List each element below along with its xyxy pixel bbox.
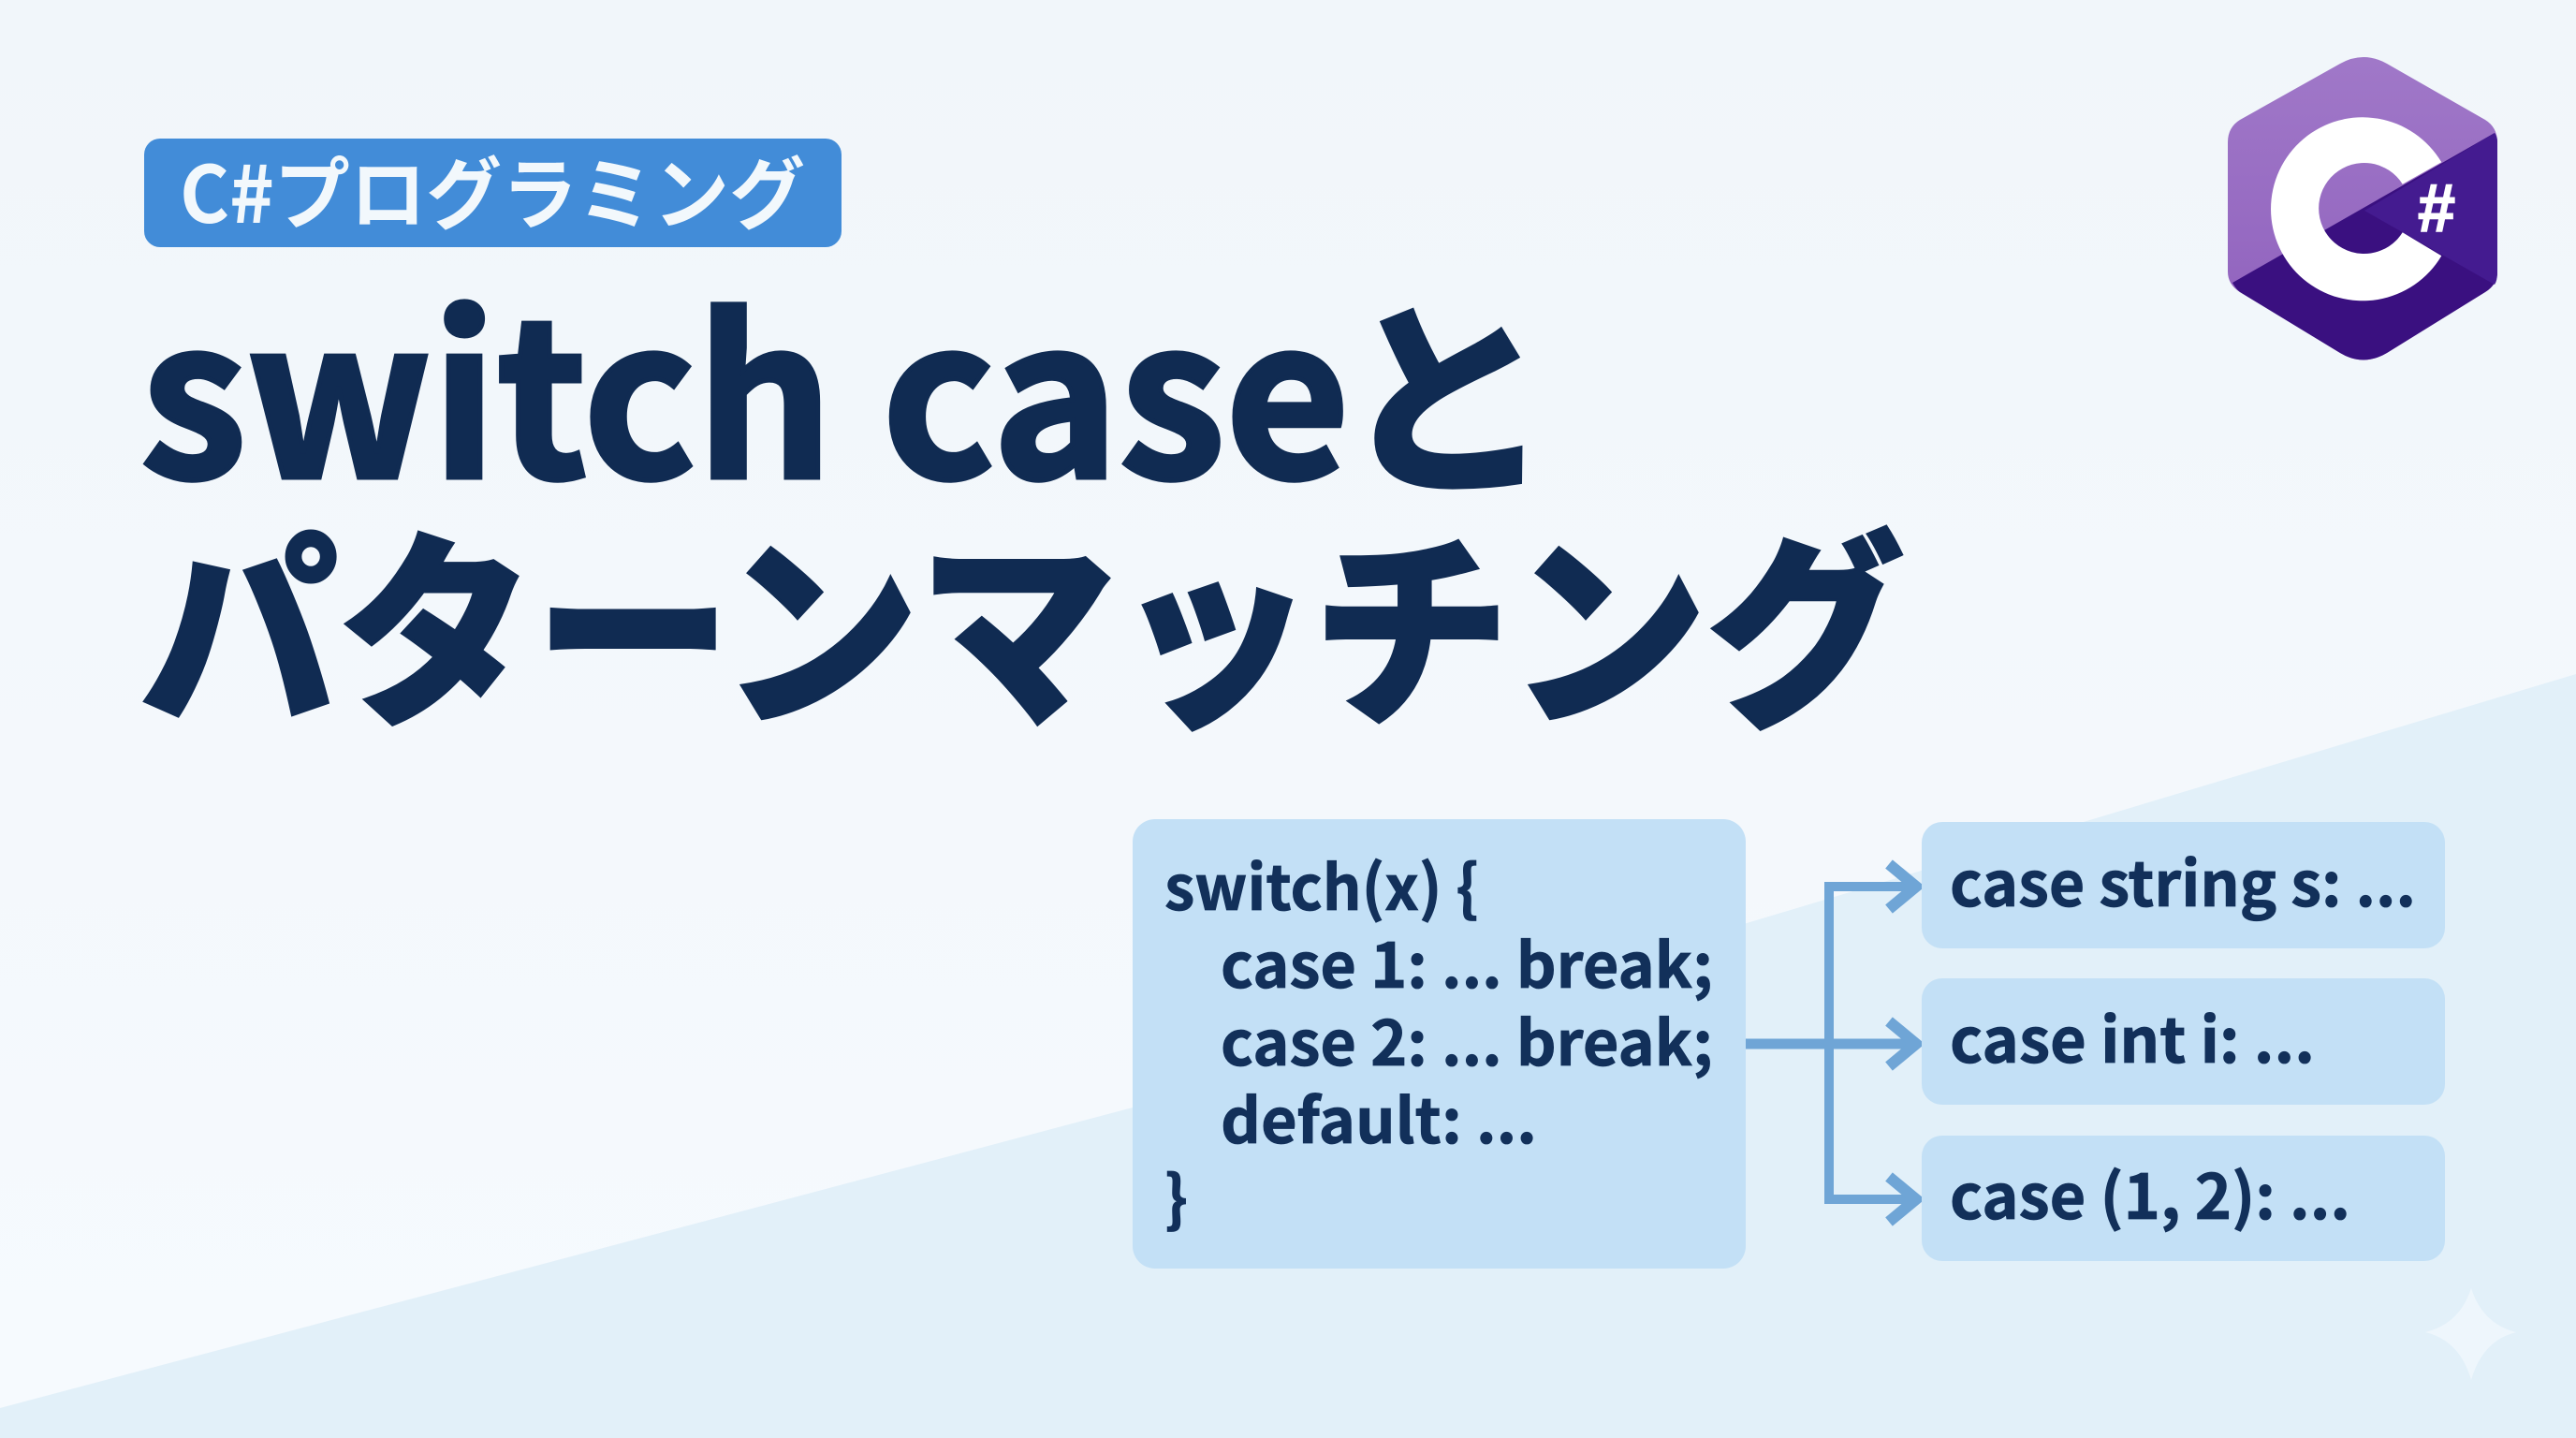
category badge: C#プログラミング — [180, 133, 805, 246]
panel: case tuple: case (1, 2): ... — [1950, 1148, 2350, 1238]
panel: case int — [1922, 978, 2445, 1105]
panel: case int: case int i: ... — [1950, 991, 2315, 1081]
panel: switch code — [1133, 819, 1746, 1269]
panel: switch code: default: ... — [1221, 1072, 1537, 1162]
icon: C# logo: # — [2418, 171, 2455, 246]
title — [140, 226, 1904, 769]
panel: case string — [1922, 822, 2445, 948]
panel: switch code: case 1: ... break; — [1221, 917, 1713, 1006]
panel: case string: case string s: ... — [1950, 835, 2416, 925]
panel: switch code: case 2: ... break; — [1221, 994, 1713, 1084]
icon: sparkle — [2425, 1288, 2516, 1380]
title: switch case — [140, 226, 1350, 540]
title: パターンマッチング — [140, 467, 1904, 769]
icon: C# logo — [2228, 57, 2497, 360]
panel: case tuple — [1922, 1136, 2445, 1261]
background diagonal band — [0, 674, 2576, 1438]
panel: switch code: } — [1164, 1150, 1188, 1240]
panel: switch code: switch(x) { — [1164, 839, 1479, 929]
arrows: branch connector — [1746, 864, 1916, 1222]
title: と — [1340, 236, 1552, 538]
